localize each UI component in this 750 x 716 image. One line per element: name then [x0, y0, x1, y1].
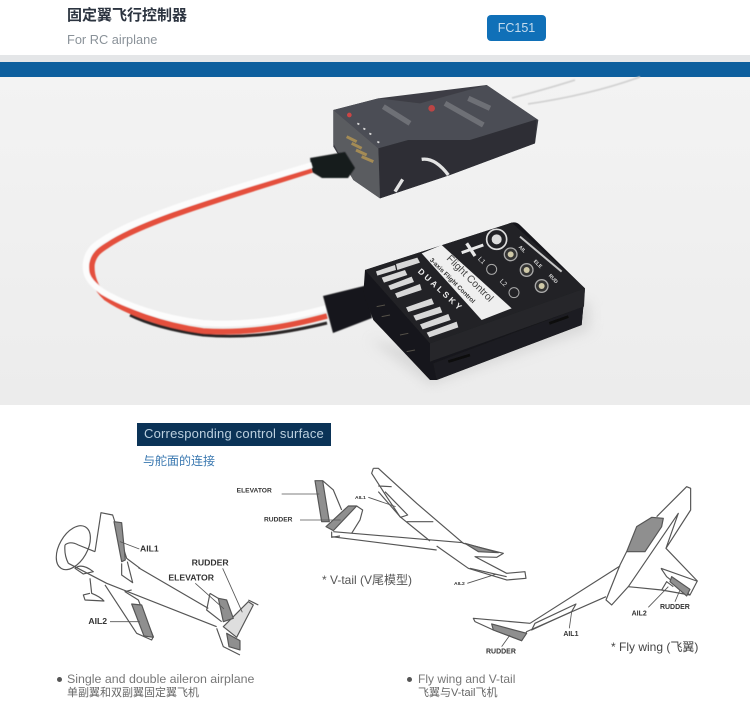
model badge [487, 15, 546, 41]
V-tail note: * V-tail (V尾模型) [322, 573, 412, 587]
cable [86, 165, 327, 336]
model badge: FC151 [498, 21, 535, 35]
section subheading: 与舵面的连接 [143, 454, 215, 468]
logo and knobs [462, 229, 562, 298]
plane diagram: single and double aileron: AIL1 [140, 543, 159, 553]
caption chinese: 飞翼与V-tail飞机 [418, 687, 497, 699]
caption bullet [407, 677, 412, 682]
plane diagram: V-tail: ELEVATOR [237, 487, 272, 494]
caption: fly wing and V-tail [407, 672, 515, 699]
logo and knobs: AIL [517, 245, 527, 254]
caption: aileron airplane [57, 672, 254, 699]
caption english: Single and double aileron airplane [67, 672, 254, 686]
plane diagram: fly wing: RUDDER [486, 648, 516, 655]
upper connector [310, 152, 355, 178]
port labels [376, 258, 458, 337]
plane diagram: V-tail: AIL1 [355, 495, 366, 501]
fly wing note: * Fly wing (飞翼) [611, 640, 698, 654]
subtitle: For RC airplane [67, 32, 157, 47]
plane diagram: single and double aileron: RUDDER [192, 558, 229, 568]
logo and knobs: L2 [498, 278, 508, 289]
plane diagram: fly wing: AIL2 [632, 611, 647, 618]
caption english: Fly wing and V-tail [418, 672, 515, 686]
logo and knobs: ELE [532, 259, 543, 270]
receiver [333, 85, 538, 198]
device: flight controller [363, 222, 585, 380]
section heading [137, 423, 331, 446]
plane diagram: fly wing: AIL1 [563, 631, 579, 638]
logo and knobs: RUD [547, 273, 559, 285]
white label [422, 245, 512, 320]
plane diagram: fly wing [473, 487, 697, 655]
plane diagram: V-tail [237, 468, 526, 587]
caption bullet [57, 677, 62, 682]
plane diagram: single and double aileron: ELEVATOR [168, 572, 215, 582]
device shadow [370, 300, 590, 385]
brand: DUALSKY [416, 266, 466, 314]
title: 固定翼飞行控制器 [67, 7, 187, 24]
antenna wires [512, 77, 640, 104]
plane diagram: V-tail: RUDDER [264, 517, 293, 524]
lower connector [323, 285, 372, 333]
caption chinese: 单副翼和双副翼固定翼飞机 [67, 687, 199, 699]
plane diagram: single and double aileron: AIL2 [88, 616, 107, 626]
plane diagram: fly wing: RUDDER [660, 604, 690, 611]
white label: Flight Control [444, 253, 495, 305]
logo and knobs: L1 [476, 256, 487, 266]
plane diagram: V-tail: AIL2 [454, 581, 465, 587]
section heading: Corresponding control surface [144, 426, 324, 441]
white label: 3-axis Flight Control [428, 257, 476, 305]
header band [0, 55, 750, 77]
